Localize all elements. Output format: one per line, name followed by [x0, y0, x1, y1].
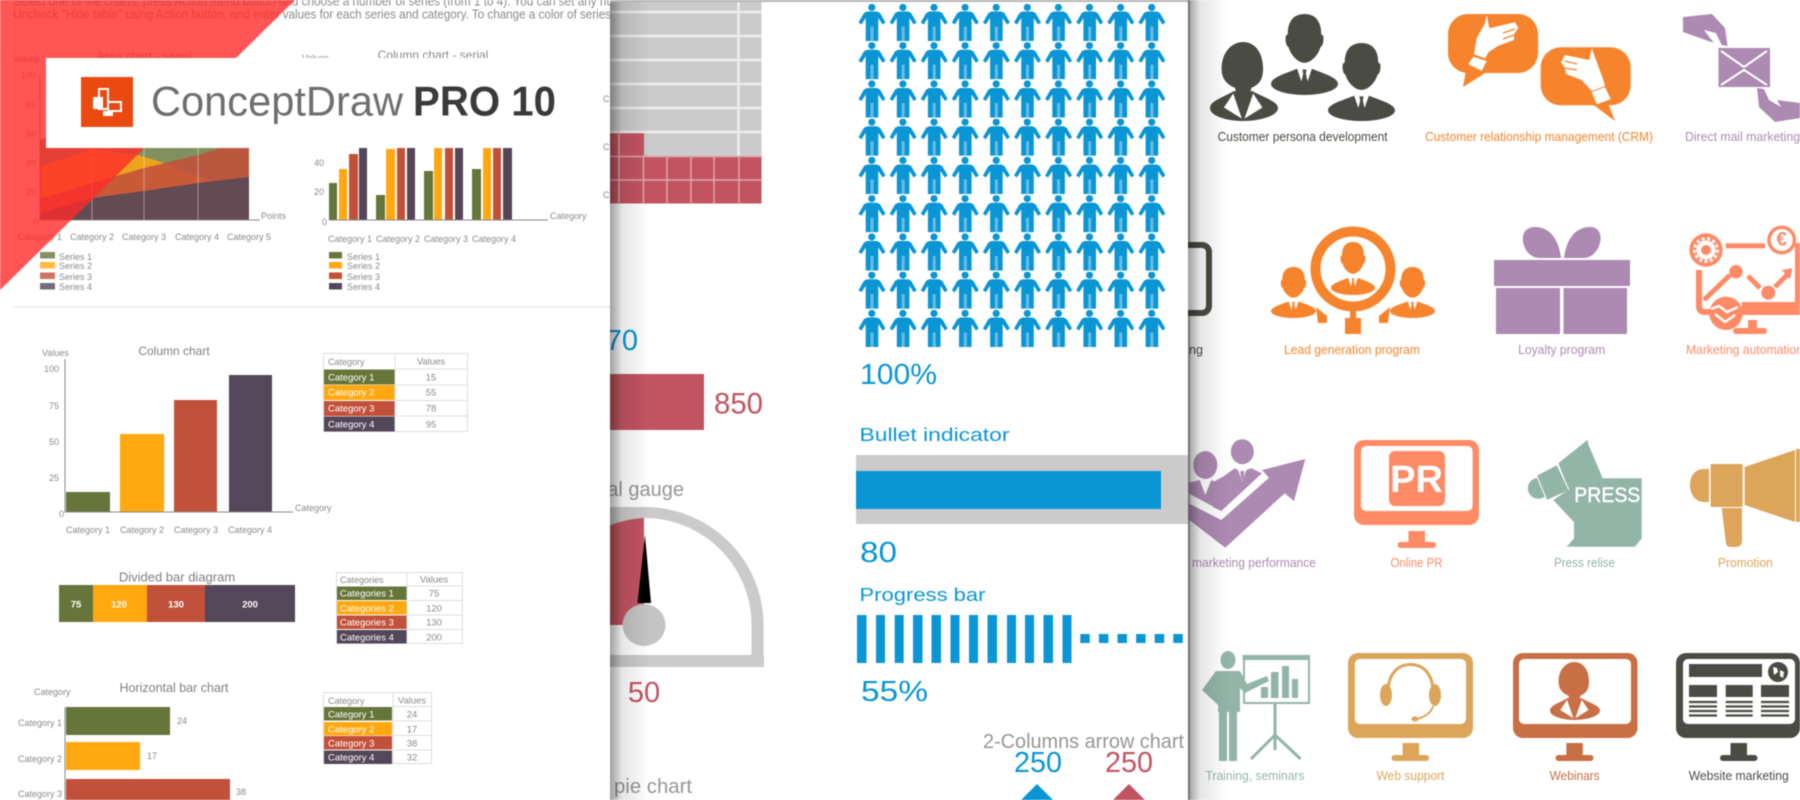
- icon: promotion: [1690, 449, 1800, 570]
- progress bar: [857, 585, 1183, 708]
- table: horizontal bar values: 17: [407, 724, 417, 736]
- column chart - serial: C: [603, 190, 610, 200]
- table: horizontal bar values: Category 3: [328, 738, 374, 750]
- column chart - serial: Series 1: [347, 252, 380, 262]
- icon: online PR: [1354, 440, 1479, 570]
- area chart - serial: 40: [26, 158, 36, 168]
- column chart - serial: C: [603, 94, 610, 104]
- icon: marketing performance: marketing performance: [1192, 556, 1316, 570]
- table: divided bar values: 130: [426, 618, 442, 628]
- area chart - serial: 60: [26, 129, 36, 139]
- area chart - serial: 80: [26, 100, 36, 110]
- column chart: Category: [295, 503, 332, 513]
- dial gauge: [609, 480, 764, 703]
- table: horizontal bar values: 24: [407, 710, 417, 720]
- horizontal bar chart: Category: [34, 687, 71, 697]
- table: column chart values: 55: [426, 388, 436, 398]
- column chart - serial: [302, 48, 610, 292]
- table: divided bar values: Values: [420, 574, 448, 586]
- dial gauge: Dial gauge: [588, 479, 684, 501]
- horizontal bar chart: [18, 681, 246, 800]
- divided bar diagram: 200: [242, 600, 258, 610]
- horizontal bar chart: 38: [236, 787, 246, 797]
- column chart - serial: Category 3: [424, 234, 468, 244]
- instruction text: [13, 0, 613, 22]
- panel: chart samples sheet: [0, 0, 613, 800]
- column chart: 75: [49, 401, 59, 411]
- icon: marketing automation: [1686, 226, 1800, 357]
- table: divided bar values: 75: [429, 588, 439, 600]
- column chart - serial: 20: [314, 187, 324, 197]
- icon: training, seminars: Training, seminars: [1206, 769, 1304, 783]
- icon: logo square: [81, 77, 133, 127]
- right panel edge shadow: [1188, 0, 1228, 800]
- area chart - serial: [13, 49, 287, 292]
- icon: customer persona development: Customer persona development: [1218, 130, 1388, 144]
- icon: loyalty program: [1494, 227, 1630, 357]
- area chart - serial: Category 2: [70, 232, 114, 242]
- area chart - serial: Category 3: [122, 232, 166, 242]
- icon: customer relationship management: Customer relationship management (CRM): [1425, 130, 1653, 144]
- logo wordmark: ConceptDraw: [151, 78, 404, 124]
- table: divided bar values: Categories 3: [340, 618, 394, 628]
- table: horizontal bar values: Category 4: [328, 752, 374, 764]
- waffle chart: [610, 2, 762, 204]
- divided bar diagram: [59, 570, 295, 622]
- area chart - serial: Area chart - serial: [97, 49, 191, 63]
- area chart - serial: Values: [13, 54, 40, 64]
- table: horizontal bar values: Category 1: [328, 710, 374, 720]
- icon: press release: [1528, 440, 1642, 570]
- icon: lead generation program: [1271, 232, 1435, 357]
- 2-columns arrow chart: [983, 731, 1184, 800]
- column chart: 25: [49, 473, 59, 483]
- pictorial chart: people: [858, 4, 1165, 347]
- table: column chart values: Category 2: [328, 388, 374, 398]
- column chart: 100: [44, 364, 59, 374]
- table: column chart values: 15: [426, 372, 436, 384]
- icon: web support: [1348, 653, 1473, 783]
- column chart: Column chart: [138, 344, 210, 358]
- table: horizontal bar values: Values: [398, 696, 426, 706]
- icon: press release: PRESS: [1574, 484, 1640, 507]
- icon: webinars: Webinars: [1550, 769, 1600, 783]
- icon: direct mail marketing: [1683, 14, 1800, 144]
- table: column chart values: Category 1: [328, 372, 374, 384]
- panel: marketing icons: [1160, 0, 1800, 800]
- 2-columns arrow chart: 250: [1105, 747, 1153, 779]
- table: column chart values: Category 4: [328, 420, 374, 430]
- horizontal bar chart: Category 2: [18, 754, 62, 764]
- column chart - serial: Category: [550, 211, 587, 221]
- bullet indicator: [856, 425, 1201, 569]
- table: divided bar values: 200: [426, 632, 442, 644]
- icon: web support: Web support: [1376, 769, 1445, 783]
- icon: direct mail marketing: Direct mail marketing: [1685, 130, 1800, 144]
- column chart - serial: 0: [322, 217, 327, 227]
- horizontal bar chart: 24: [177, 716, 187, 726]
- area chart - serial: Category 4: [175, 232, 219, 242]
- column chart - serial: Series 3: [347, 272, 380, 282]
- column chart - serial: Series 4: [347, 282, 380, 292]
- area chart - serial: 0: [33, 217, 38, 227]
- icon: press release: Press relise: [1554, 556, 1615, 570]
- column chart - serial: Column chart - serial: [378, 48, 488, 62]
- pictorial value: 100%: [860, 359, 937, 391]
- progress bar: Progress bar: [860, 585, 986, 605]
- table: horizontal bar values: [324, 692, 432, 764]
- icon: marketing performance: [1188, 439, 1316, 570]
- icon: clipped device: [1188, 241, 1213, 358]
- panel: dashboard indicators: [560, 0, 1201, 800]
- 2-columns arrow chart: 2-Columns arrow chart: [983, 731, 1184, 753]
- column chart - serial: Category 4: [472, 234, 516, 244]
- area chart - serial: Category 1: [18, 232, 62, 242]
- table: horizontal bar values: 32: [407, 752, 417, 764]
- table: column chart values: 78: [426, 404, 436, 414]
- icon: training, seminars: [1202, 651, 1310, 783]
- table: divided bar values: Categories: [340, 575, 384, 585]
- left edge shadow: [610, 2, 640, 800]
- area chart - serial: Points: [261, 211, 287, 221]
- column chart: 0: [59, 509, 64, 519]
- table: column chart values: Category: [328, 357, 365, 367]
- column chart - serial: Series 2: [347, 261, 380, 271]
- area chart - serial: Series 4: [59, 282, 92, 292]
- table: horizontal bar values: Category: [328, 696, 365, 706]
- table: divided bar values: Categories 2: [340, 604, 394, 614]
- horizontal bar chart: 17: [147, 751, 157, 761]
- area chart - serial: Series 2: [59, 261, 92, 271]
- icon: lead generation program: Lead generation program: [1284, 343, 1420, 357]
- column chart: 50: [49, 437, 59, 447]
- column chart - serial: Values: [302, 53, 329, 63]
- pie chart heading: pie chart: [614, 776, 692, 798]
- logo banner: [46, 58, 598, 148]
- column chart - serial: 40: [314, 158, 324, 168]
- bullet indicator: Bullet indicator: [860, 425, 1010, 445]
- horizontal bar chart: Horizontal bar chart: [119, 681, 229, 695]
- area chart - serial: Category 5: [227, 232, 271, 242]
- divided bar diagram: 130: [168, 600, 184, 610]
- divided bar diagram: Divided bar diagram: [119, 570, 235, 584]
- icon: online PR: Online PR: [1390, 556, 1442, 570]
- bullet indicator: 80: [860, 537, 897, 569]
- icon: customer persona development: [1210, 14, 1395, 144]
- icon: webinars: [1513, 653, 1638, 783]
- table: horizontal bar values: 38: [407, 738, 417, 750]
- column chart - serial: Category 2: [376, 234, 420, 244]
- column chart - serial: C: [603, 142, 610, 152]
- red corner triangle: [0, 0, 295, 290]
- table: column chart values: Values: [417, 356, 445, 368]
- table: column chart values: Category 3: [328, 404, 374, 414]
- logo product name: PRO 10: [413, 78, 556, 124]
- horizontal bar chart: Category 1: [18, 718, 62, 728]
- table: horizontal bar values: Category 2: [328, 724, 374, 736]
- table: divided bar values: [336, 572, 462, 644]
- column chart: Values: [42, 348, 69, 358]
- icon: customer relationship management: [1425, 14, 1653, 144]
- area chart - serial: Series 3: [59, 272, 92, 282]
- icon: website marketing: Website marketing: [1689, 769, 1789, 783]
- icon: online PR: PR: [1390, 459, 1443, 501]
- divided bar diagram: 75: [71, 600, 82, 610]
- table: divided bar values: 120: [426, 604, 442, 614]
- area chart - serial: Series 1: [59, 252, 92, 262]
- divided bar diagram: 120: [111, 600, 127, 610]
- area chart - serial: 100: [21, 70, 36, 80]
- column chart: [42, 344, 332, 535]
- column chart: Category 3: [174, 525, 218, 535]
- icon: marketing automation: €: [1776, 230, 1787, 250]
- icon: loyalty program: Loyalty program: [1518, 343, 1605, 357]
- icon: website marketing: [1676, 653, 1800, 783]
- red bar with value 850: [610, 374, 763, 430]
- table: column chart values: 95: [426, 420, 436, 430]
- column chart: Category 4: [228, 525, 272, 535]
- table: divided bar values: Categories 4: [340, 632, 394, 644]
- dial gauge: 50: [628, 677, 660, 709]
- table: divided bar values: Categories 1: [340, 588, 394, 600]
- progress bar: 55%: [861, 676, 928, 708]
- icon: promotion: Promotion: [1718, 556, 1773, 570]
- table: column chart values: [324, 353, 468, 432]
- 2-columns arrow chart: 250: [1014, 747, 1062, 779]
- column chart: Category 2: [120, 525, 164, 535]
- area chart - serial: 20: [26, 187, 36, 197]
- horizontal bar chart: Category 3: [18, 789, 62, 799]
- bullet value 70: 70: [606, 325, 638, 357]
- column chart - serial: Category 1: [328, 234, 372, 244]
- red bar with value 850: 850: [714, 388, 763, 420]
- instruction text: Uncheck "Hide table" using Action button, and enter values for each series and category. To change a color of series: [13, 6, 611, 22]
- column chart: Category 1: [66, 525, 110, 535]
- icon: clipped device: ng: [1189, 343, 1203, 357]
